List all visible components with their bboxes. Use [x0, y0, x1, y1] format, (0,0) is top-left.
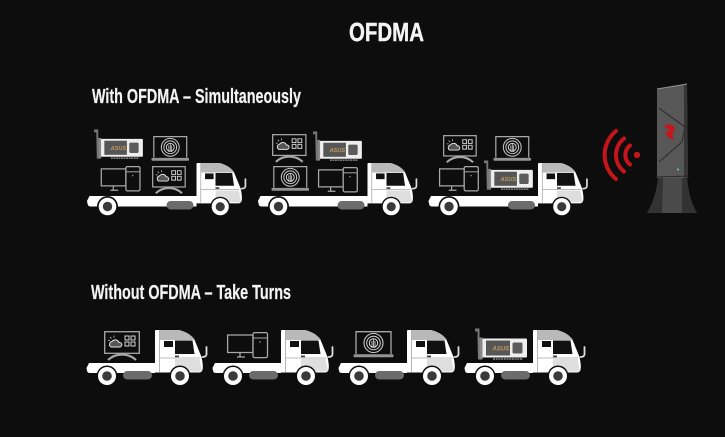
truck 3 with simultaneous load	[428, 136, 587, 217]
truck 1 with simultaneous load	[87, 129, 245, 217]
icon: desktop computer	[228, 333, 268, 358]
icon: laptop	[151, 137, 189, 161]
icon: smart TV	[105, 332, 139, 360]
icon: desktop computer	[319, 168, 357, 192]
icon: network card	[94, 129, 143, 159]
truck: desktop turn	[212, 330, 333, 386]
truck: smart TV turn	[86, 330, 207, 386]
router	[647, 84, 697, 213]
icon: network card	[484, 160, 533, 190]
icon: smart TV	[273, 135, 306, 162]
icon: desktop computer	[440, 167, 478, 191]
icon: laptop	[354, 332, 394, 357]
title: OFDMA	[349, 17, 424, 47]
icon: desktop computer	[101, 167, 140, 191]
icon: smart TV	[153, 167, 185, 193]
icon: laptop	[493, 137, 531, 161]
icon: smart TV	[444, 136, 476, 162]
icon: network card	[475, 328, 527, 360]
heading: with OFDMA: With OFDMA – Simultaneously	[92, 86, 302, 108]
heading: without OFDMA: Without OFDMA – Take Turns	[91, 282, 291, 304]
truck: network card turn	[464, 328, 585, 386]
wifi signal	[605, 131, 640, 179]
icon: laptop	[271, 167, 309, 191]
truck 2 with simultaneous load	[258, 131, 416, 217]
icon: network card	[313, 131, 362, 161]
truck: laptop turn	[338, 330, 459, 386]
router logo	[664, 124, 675, 140]
status light	[677, 168, 679, 170]
